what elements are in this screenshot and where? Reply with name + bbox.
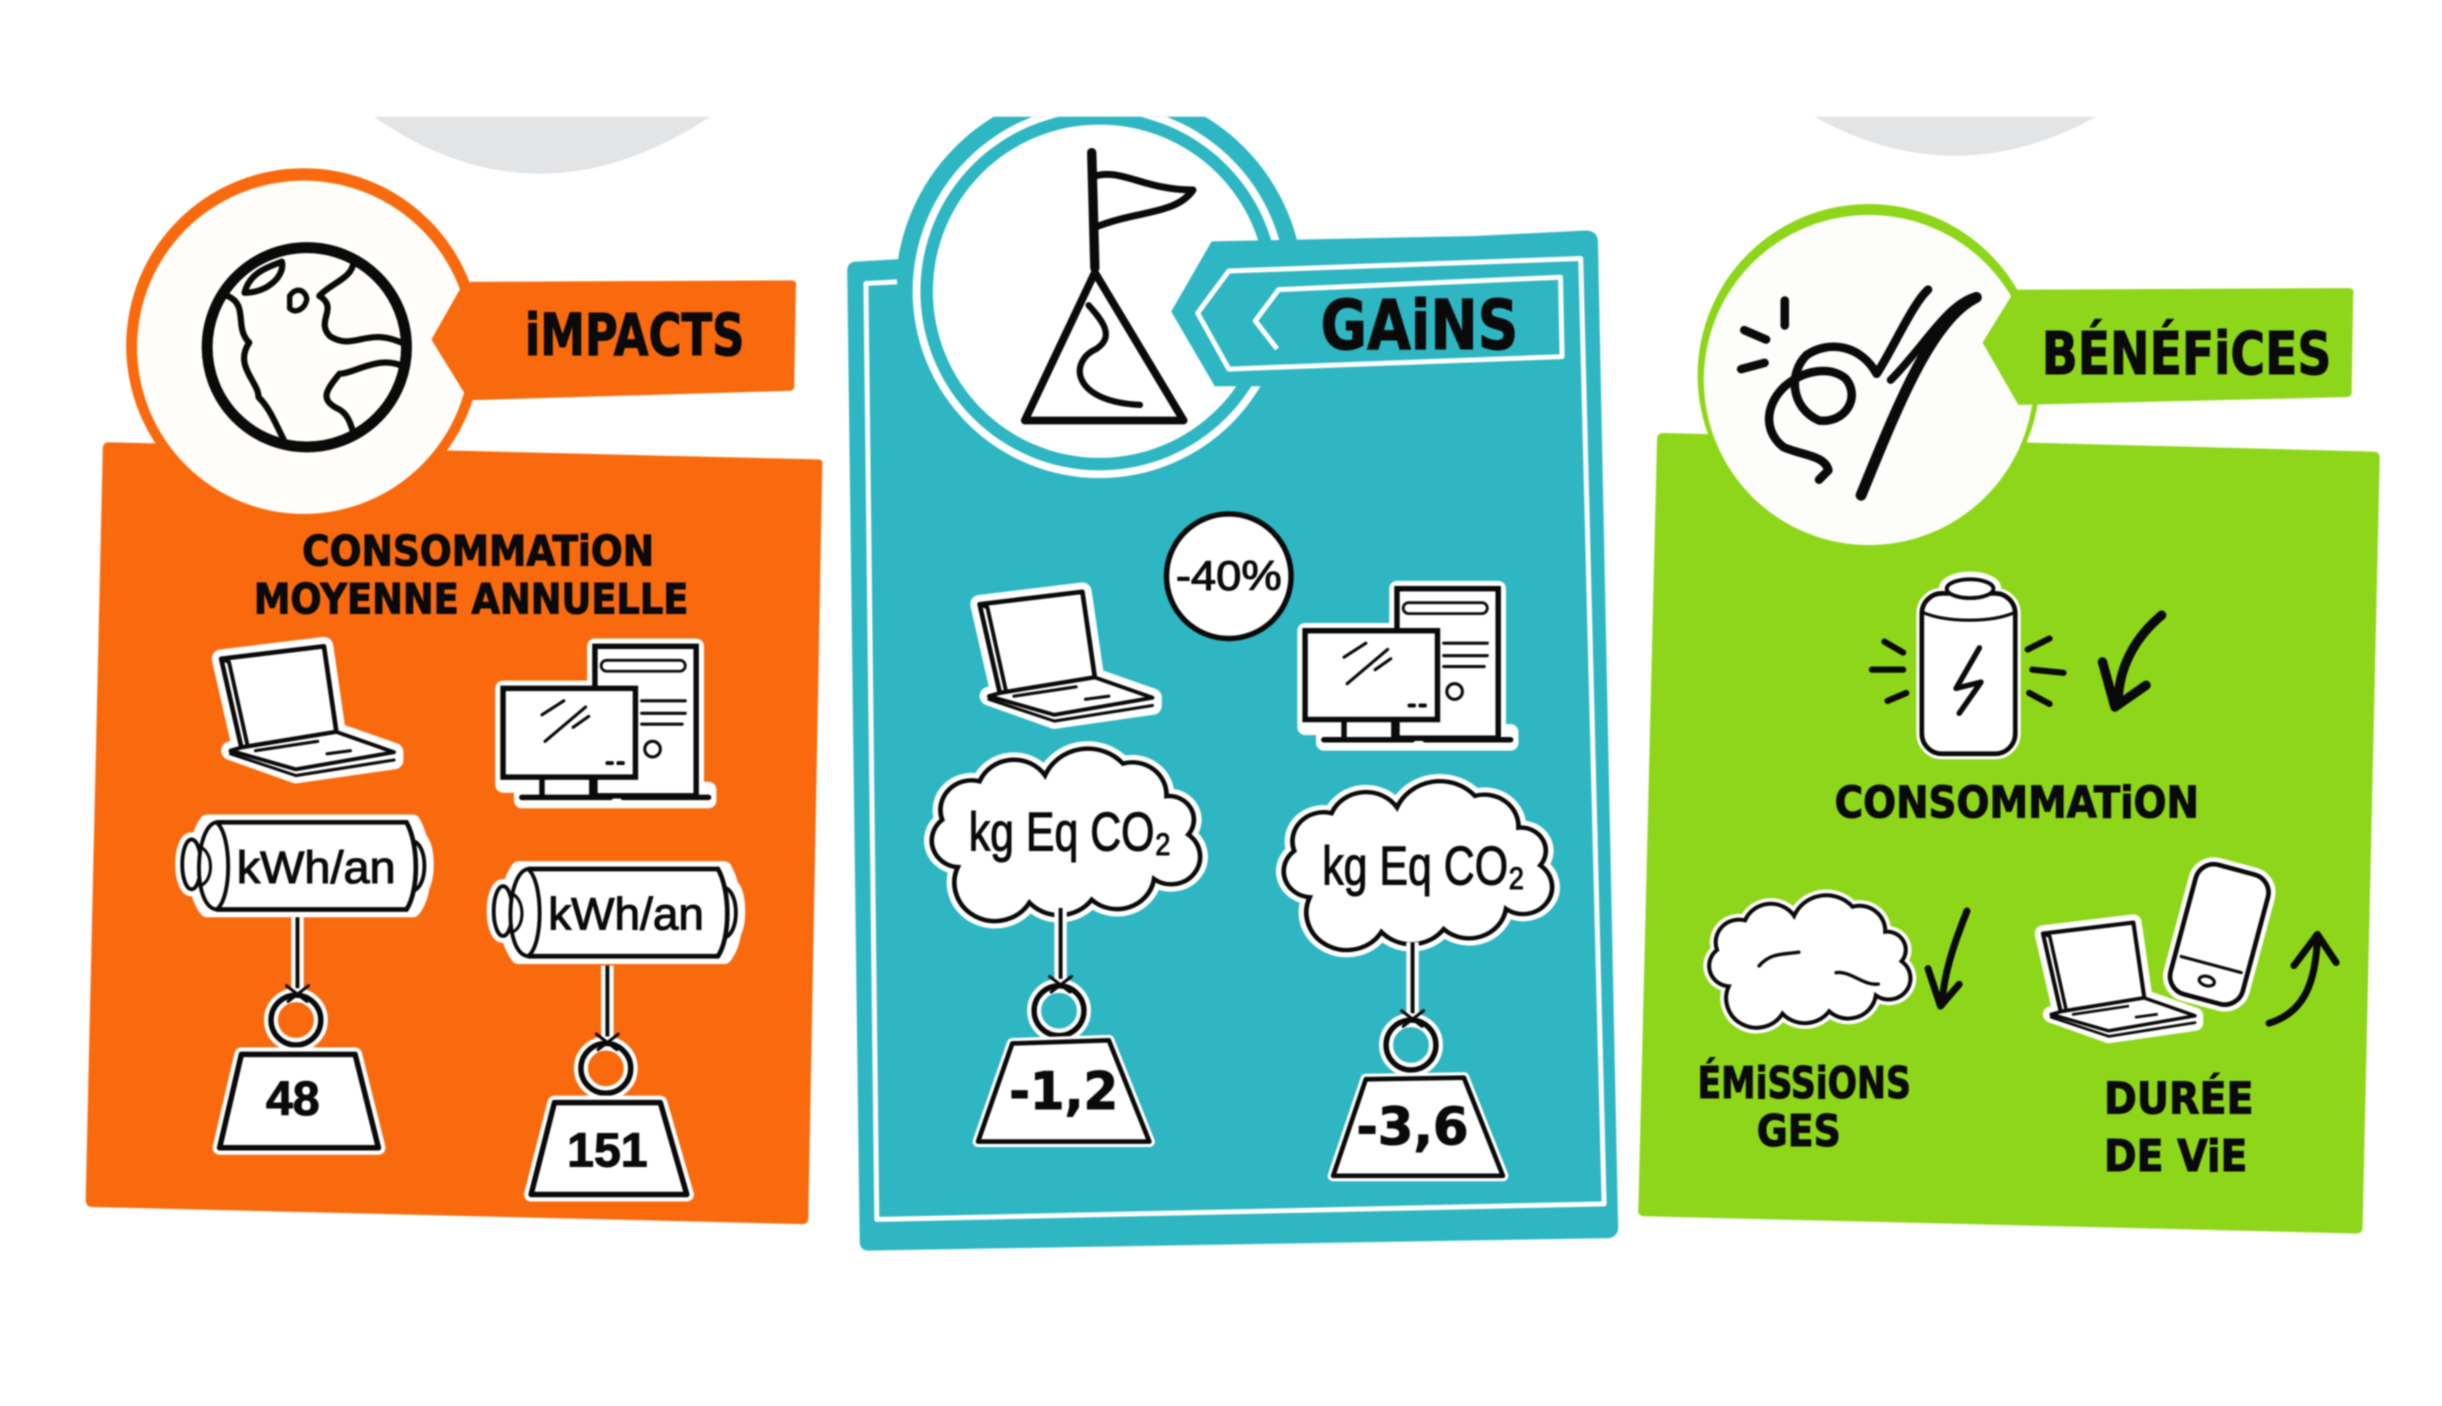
label: émissions GES	[1698, 1056, 1911, 1157]
weight: 151	[531, 1103, 687, 1195]
orange panel background	[86, 442, 823, 1224]
icon: laptop	[980, 592, 1152, 721]
arrow: consumption down	[2102, 615, 2162, 707]
cloud: desktop CO2: kg Eq CO₂	[1322, 836, 1525, 897]
icon: laptop and phone	[2043, 860, 2273, 1036]
impacts banner	[431, 280, 796, 400]
label: émissions GES: GES	[1757, 1107, 1841, 1157]
heading: bénéfices: BÉNÉFiCES	[2042, 319, 2331, 388]
label: émissions GES: ÉMiSSiONS	[1698, 1056, 1911, 1109]
gains icon disc	[913, 104, 1286, 478]
icon: mountain with flag	[1025, 153, 1193, 420]
icon: small cloud	[1709, 895, 1910, 1028]
label: consommation: CONSOMMATiON	[1835, 779, 2199, 829]
hanging link: desktop	[1386, 942, 1436, 1070]
subtitle: consommation moyenne annuelle: CONSOMMATiON	[302, 526, 654, 575]
icon: battery	[1872, 576, 2064, 754]
weight: 151: 151	[567, 1123, 648, 1177]
subtitle: consommation moyenne annuelle: MOYENNE ANNUELLE	[254, 575, 688, 624]
roller: desktop kWh per year	[494, 869, 738, 956]
weight: -1,2: -1,2	[1009, 1062, 1118, 1122]
grey arc: left background shape	[374, 117, 710, 174]
cloud: laptop CO2	[932, 749, 1200, 921]
heading: impacts: iMPACTS	[525, 302, 744, 369]
panel: bénéfices	[1638, 204, 2380, 1233]
weight: -3,6	[1333, 1078, 1503, 1176]
panel: gains	[847, 87, 1618, 1251]
arrow: lifetime up	[2269, 934, 2336, 1023]
hanging link: laptop	[271, 917, 321, 1045]
label: durée de vie	[2104, 1072, 2254, 1182]
panel: impacts	[86, 168, 823, 1224]
heading: gains: GAiNS	[1321, 286, 1518, 366]
roller: laptop kWh per year	[182, 822, 427, 910]
white panel border	[866, 259, 1604, 1219]
weight: 48	[220, 1054, 378, 1148]
impacts icon disc	[126, 168, 481, 523]
gains banner tab	[1171, 234, 1596, 386]
icon: OK hand	[1741, 290, 1976, 495]
cloud: desktop CO2	[1284, 781, 1552, 950]
arrow: emissions down	[1928, 911, 1967, 1006]
weight: -1,2	[978, 1040, 1149, 1142]
bénéfices banner	[1983, 288, 2354, 405]
badge: -40%: -40%	[1176, 552, 1282, 599]
weight: -3,6: -3,6	[1356, 1098, 1469, 1158]
badge: -40%	[1166, 514, 1291, 639]
icon: desktop computer	[1305, 589, 1511, 743]
label: durée de vie: DE ViE	[2104, 1132, 2247, 1182]
icon: laptop	[221, 646, 394, 776]
hanging link: laptop	[1034, 908, 1084, 1036]
weight: 48: 48	[266, 1072, 320, 1126]
roller: laptop kWh per year: kWh/an	[237, 842, 396, 893]
hanging link: desktop	[581, 966, 631, 1093]
bénéfices icon disc	[1698, 204, 2040, 547]
roller: desktop kWh per year: kWh/an	[548, 889, 704, 940]
subtitle: consommation moyenne annuelle	[254, 526, 688, 624]
teal panel background	[847, 87, 1618, 1251]
label: durée de vie: DURÉE	[2104, 1072, 2254, 1125]
icon: globe	[207, 248, 408, 449]
cloud: laptop CO2: kg Eq CO₂	[969, 801, 1171, 862]
green panel background	[1638, 433, 2380, 1233]
grey arc: right background shape	[1814, 117, 2096, 156]
icon: desktop computer	[503, 646, 709, 800]
